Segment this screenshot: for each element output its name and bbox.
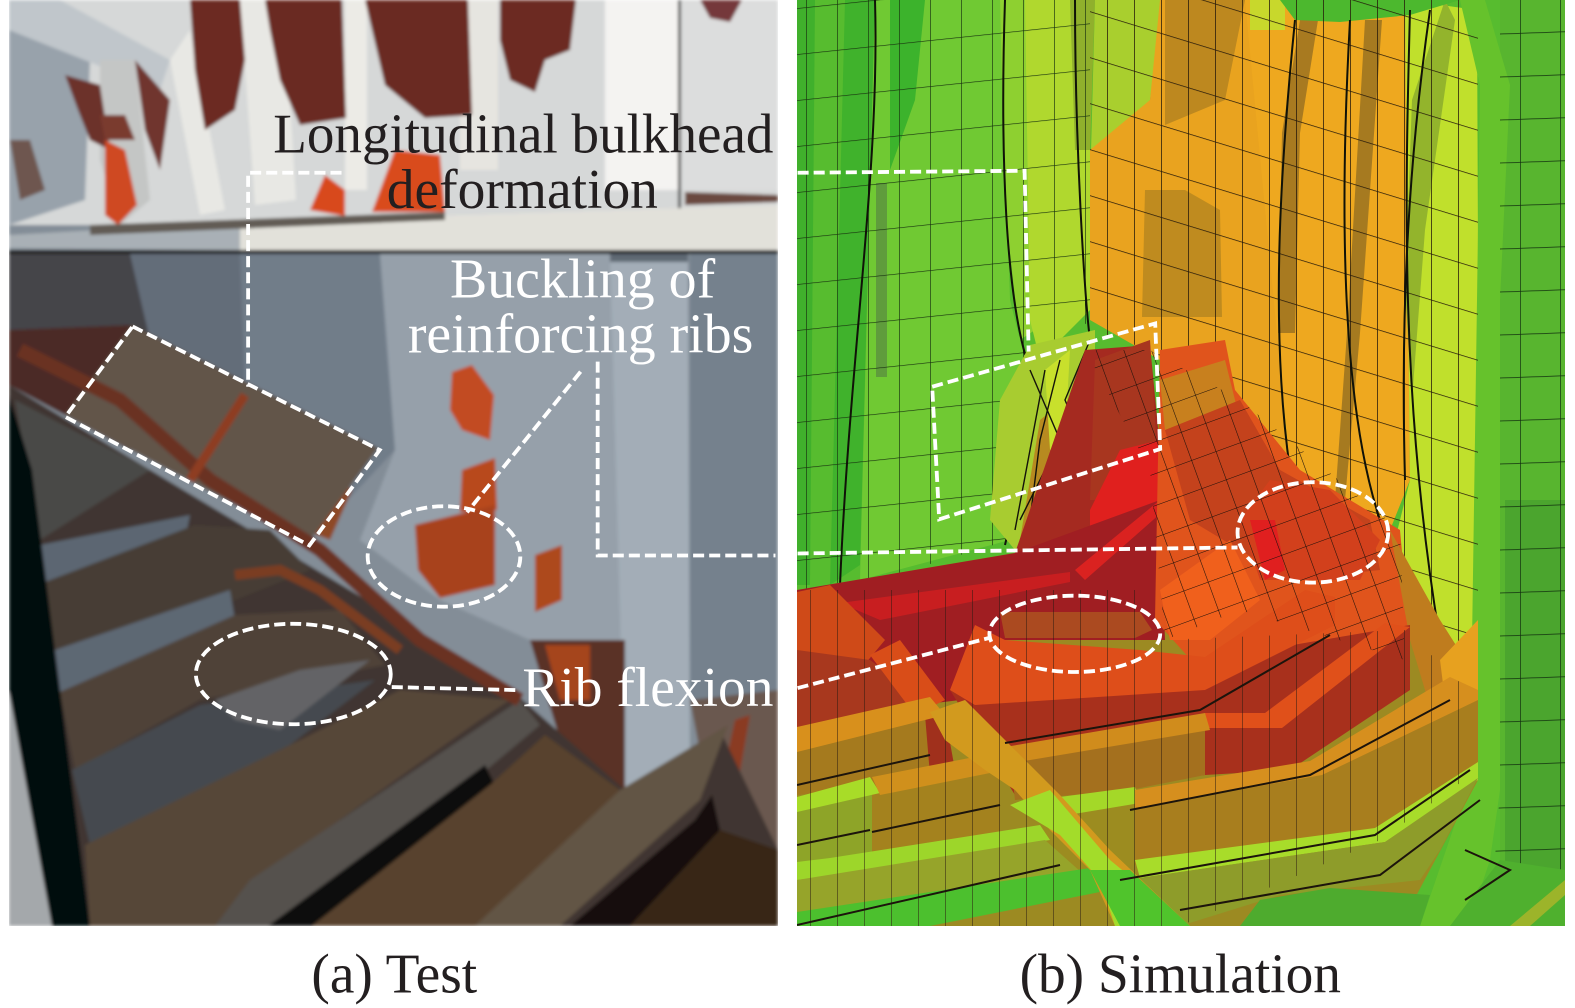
panel: simulation mesh [797,0,1565,926]
leader: rib flexion in test [392,687,517,690]
flange row B [797,777,880,812]
buckled zone at the shell foot [990,330,1095,550]
rust ridge [20,350,520,700]
leader: bulkhead deformation in simulation [798,171,1029,352]
label: buckling of reinforcing ribs [408,248,753,366]
flange row D [797,868,1110,926]
horizontal beam [9,222,240,250]
flange row A [797,697,945,752]
lower wall [9,252,150,334]
ellipse: buckling in test [368,506,520,607]
brown webs [797,720,929,795]
cross member [930,700,1190,926]
fold lines [840,0,1440,640]
leader: rib flexion in simulation [798,638,989,688]
ellipse: buckling in simulation [1238,482,1388,583]
dashed annotation overlays [65,171,1388,724]
flange row C [797,825,1050,880]
shell folds [797,0,815,585]
leader: buckling in test [467,372,581,512]
caption: test: (a) Test [311,943,477,1005]
leader: buckling in simulation [798,547,1238,553]
second flange [1205,623,1410,728]
red floor web [1015,346,1158,553]
left edge [9,690,52,926]
curtain base right [1390,530,1456,692]
leader: buckling across both panels [598,362,775,555]
stair zone [9,385,778,926]
label: buckling of reinforcing ribs: reinforcing ribs [408,304,753,366]
panel: test photograph [9,0,778,926]
leader: bulkhead deformation in test [248,173,342,387]
label: longitudinal bulkhead deformation: Longitudinal bulkhead [273,104,773,166]
shell mesh [797,0,1090,590]
upper wall [9,0,778,225]
ellipse: rib flexion in test [196,624,391,724]
orange patches [105,140,137,225]
top-left rust zone [9,324,130,448]
corrosion patches [450,365,494,440]
label: longitudinal bulkhead deformation: deformation [387,159,658,221]
paint patches [190,0,245,130]
bottom hump and right band [1240,888,1430,926]
floor backdrop [797,553,1478,926]
upper flange and flexed rib [950,625,1296,705]
lower webs [797,840,1090,915]
label: longitudinal bulkhead deformation [273,104,773,221]
callout box: bulkhead deformation in simulation [932,323,1160,519]
rail lines [797,635,1510,925]
ellipse: rib flexion in simulation [989,596,1160,672]
bracket on left [797,585,885,660]
wall lower right [690,690,778,860]
label: buckling of reinforcing ribs: Buckling of [450,248,715,310]
label: rib flexion: Rib flexion [522,657,773,719]
annotations group [65,104,1388,1005]
web mesh [797,590,1478,926]
callout box: bulkhead deformation in test [65,326,380,545]
rib web below upper flange [950,625,1410,795]
caption: simulation: (b) Simulation [1020,943,1341,1005]
